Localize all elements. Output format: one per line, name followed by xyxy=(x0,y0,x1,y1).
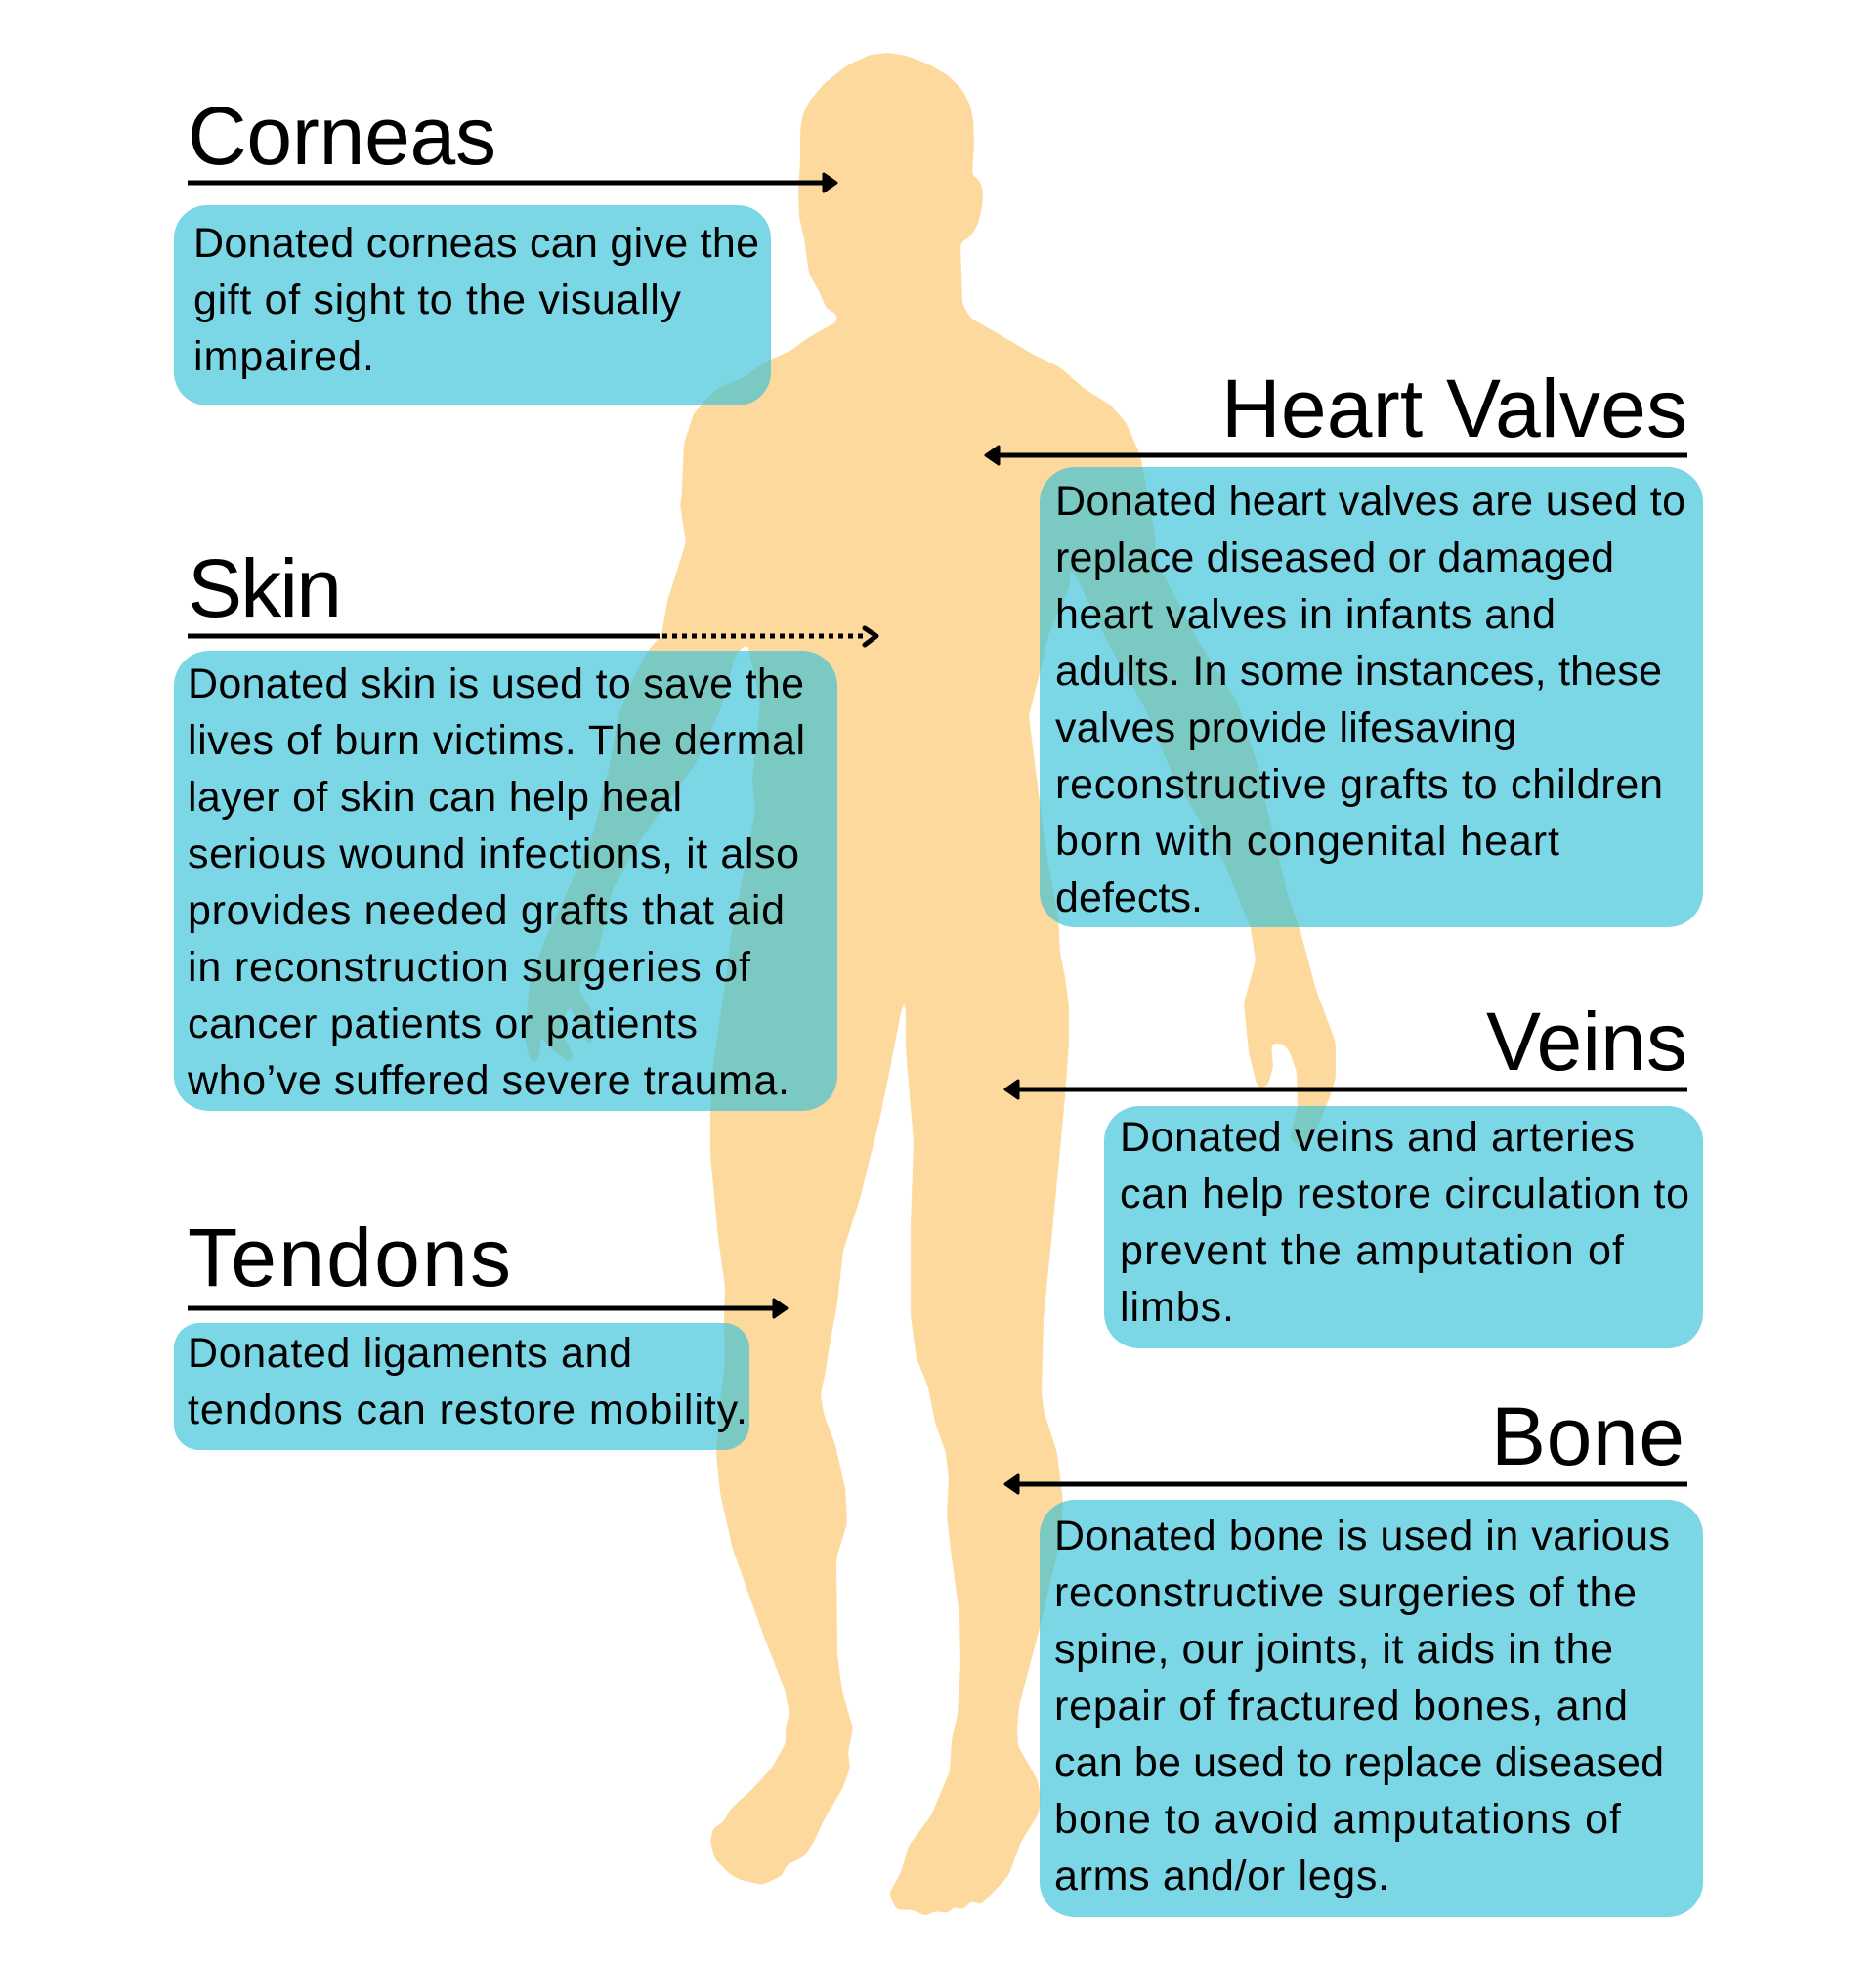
text: bone description: can be used to replace diseased xyxy=(1054,1739,1664,1786)
arrow: tendons to knee xyxy=(188,1300,787,1317)
text: bone description: spine, our joints, it aids in the xyxy=(1054,1626,1613,1673)
arrow: veins to thigh xyxy=(1005,1081,1687,1098)
text: heart valves description: defects. xyxy=(1055,874,1203,921)
text: bone description: reconstructive surgeries of the xyxy=(1054,1569,1637,1616)
text: bone description: Donated bone is used in various xyxy=(1054,1513,1670,1559)
text: bone description: arms and/or legs. xyxy=(1054,1853,1389,1899)
panel: bone xyxy=(1005,1390,1703,1917)
text: bone description: bone to avoid amputations of xyxy=(1054,1796,1622,1843)
heading: Skin: Skin xyxy=(188,542,342,634)
arrow: heart valves to chest xyxy=(986,447,1687,464)
text: heart valves description: valves provide lifesaving xyxy=(1055,704,1516,751)
text: skin description: provides needed grafts that aid xyxy=(188,887,785,934)
text: heart valves description: born with congenital heart xyxy=(1055,818,1559,865)
arrow: skin, solid then dotted xyxy=(188,628,876,645)
heading: Tendons: Tendons xyxy=(188,1212,511,1303)
panel: heart valves xyxy=(986,363,1703,927)
text: heart valves description: adults. In some instances, these xyxy=(1055,648,1662,695)
text: skin description: Donated skin is used to save the xyxy=(188,661,804,707)
heading: Bone: Bone xyxy=(1491,1390,1684,1482)
text: veins description: Donated veins and arteries xyxy=(1120,1114,1635,1161)
text: skin description: cancer patients or patients xyxy=(188,1001,698,1047)
arrow: bone to shin xyxy=(1005,1475,1687,1493)
heading: Veins: Veins xyxy=(1486,996,1687,1088)
text: skin description: serious wound infections, it also xyxy=(188,831,799,877)
text: corneas description: Donated corneas can give the xyxy=(193,220,759,267)
panel: veins xyxy=(1005,996,1703,1348)
text: veins description xyxy=(1120,1114,1689,1331)
text: veins description: limbs. xyxy=(1120,1284,1234,1331)
human body silhouette xyxy=(525,53,1336,1916)
heading: Corneas: Corneas xyxy=(188,90,496,182)
text: skin description xyxy=(187,661,805,1104)
text: bone description xyxy=(1054,1513,1670,1899)
panel: tendons xyxy=(174,1212,787,1450)
text: heart valves description: replace diseased or damaged xyxy=(1055,534,1614,581)
text: veins description: prevent the amputation of xyxy=(1120,1227,1625,1274)
text: skin description: lives of burn victims. The dermal xyxy=(188,717,805,764)
text: heart valves description: Donated heart valves are used to xyxy=(1055,478,1685,525)
text: heart valves description: heart valves in infants and xyxy=(1055,591,1556,638)
panel: corneas xyxy=(174,90,836,405)
text: heart valves description: reconstructive grafts to children xyxy=(1055,761,1663,808)
text: heart valves description xyxy=(1055,478,1685,921)
text: skin description: in reconstruction surgeries of xyxy=(188,944,751,991)
panel: skin xyxy=(174,542,876,1111)
text: skin description: layer of skin can help heal xyxy=(188,774,682,821)
text: skin description: who’ve suffered severe trauma. xyxy=(187,1057,789,1104)
text: veins description: can help restore circulation to xyxy=(1120,1171,1689,1217)
text: corneas description: gift of sight to the visually xyxy=(193,277,682,323)
text: tendons description xyxy=(188,1330,747,1433)
heading: Heart Valves: Heart Valves xyxy=(1221,363,1687,454)
text: corneas description xyxy=(193,220,759,380)
arrow: corneas to eye xyxy=(188,174,836,192)
text: tendons description: Donated ligaments and xyxy=(188,1330,632,1377)
text: bone description: repair of fractured bones, and xyxy=(1054,1683,1628,1729)
text: corneas description: impaired. xyxy=(193,333,374,380)
text: tendons description: tendons can restore mobility. xyxy=(188,1386,747,1433)
